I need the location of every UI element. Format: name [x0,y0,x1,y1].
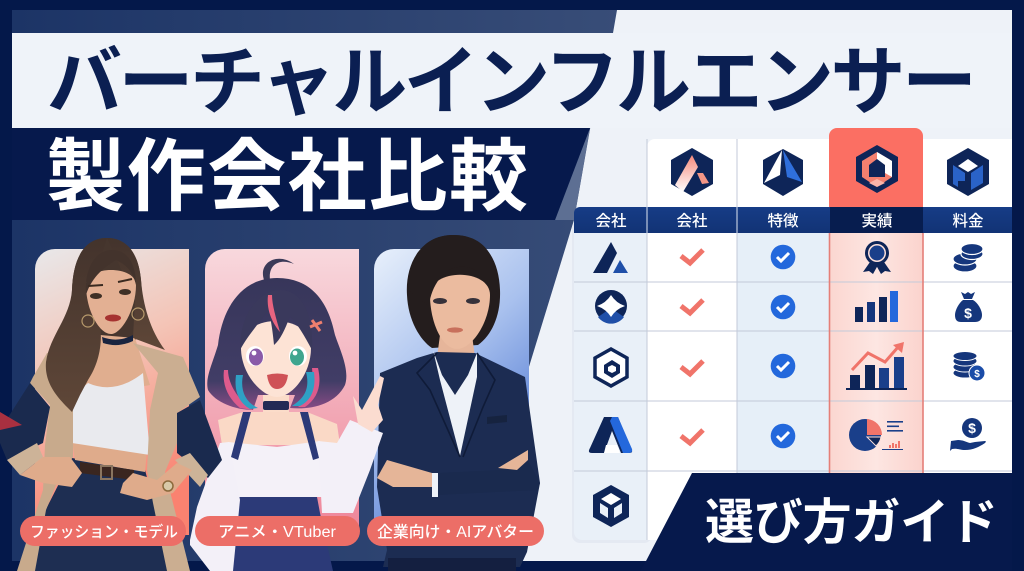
guide label: 選び方ガイド [705,496,998,550]
icon: coin stack [953,244,983,272]
straps [231,412,319,460]
icon: coins with dollar: $ [974,369,980,380]
pants [35,458,167,571]
logo 1 [671,148,713,196]
card: business [374,249,529,535]
logo 3 [856,145,898,193]
pill: anime vtuber: アニメ・VTuber [218,524,336,541]
column 5 body [923,233,1012,473]
white diagonal panel [470,10,1012,561]
card: anime [205,249,359,535]
column 1 body [574,233,647,540]
logo row [647,139,1012,207]
skirt [213,497,333,571]
table shadow [572,220,652,543]
left sleeve [190,442,240,571]
left lapel [417,353,460,457]
eyes and brows [88,279,132,299]
fringe [408,235,499,306]
chest [68,335,150,400]
belt [80,462,134,480]
pill: anime vtuber [195,516,360,546]
white blouse [228,441,322,497]
lips [447,327,463,333]
hair back [407,235,500,348]
icon: money bag [955,292,982,322]
guide band [640,473,1024,571]
highlighted logo cell [829,128,923,207]
hair behind head [72,238,143,342]
row logo: cube hex [593,485,629,527]
cuff [432,473,438,497]
header row: 特徴 [767,212,799,230]
icon: money bag: $ [964,305,972,321]
face [241,321,311,397]
pill: enterprise ai avatar: 企業向け・AIアバター [377,523,534,541]
character: business avatar [377,235,540,571]
pink strands [224,368,319,410]
icon: pie chart [849,419,903,451]
lips [105,314,121,322]
character: fashion model [0,238,222,571]
right lapel [463,353,495,457]
neck [263,392,289,416]
icon: hand with coin [950,418,986,451]
icon: coins with dollar [953,352,985,381]
pill: enterprise ai avatar [367,516,544,546]
row logo: hex ring mark [595,349,627,386]
fringe [86,250,136,295]
coral check marks [681,250,703,443]
coat left [17,350,73,571]
icon: bar chart [855,291,898,322]
subtitle band [12,128,590,221]
right sleeve [318,420,383,513]
hair clip [310,320,322,331]
icon: growth chart [846,342,907,390]
face [430,275,490,349]
pocket [487,415,507,424]
icon: award ribbon [863,241,891,274]
diagonal sliver [555,128,590,220]
bottom border [0,561,640,571]
shoulders [218,412,340,445]
row logo: A mark [593,242,628,273]
coat right [133,343,200,571]
earrings [82,308,144,327]
ahoge [263,259,294,280]
midriff [72,440,147,472]
bangs [240,290,312,350]
neck [436,335,476,385]
watch [163,481,173,491]
highlighted column borders [830,207,923,473]
teal tips [236,372,314,409]
pants [388,558,516,571]
right border [1012,0,1024,571]
shirt [433,350,477,456]
column 4 body [829,233,923,473]
eyes [246,346,307,366]
title: バーチャルインフルエンサー [47,40,977,124]
logo 2 [763,149,803,196]
grid lines [574,139,1012,540]
column 3 body [737,233,829,473]
icon: hand with coin: $ [968,420,976,436]
white top [68,373,150,455]
hair [207,278,346,410]
pill: fashion model [20,516,186,546]
comparison table [572,128,1012,543]
title band [12,33,1012,128]
header row: 実績 [861,212,893,230]
cuffs [7,443,43,475]
logo 4 [947,148,989,196]
pill: fashion model: ファッション・モデル [30,522,178,541]
column 2 body [647,233,737,540]
header row: 料金 [952,212,984,230]
lower hand [377,460,432,487]
header row [574,207,1012,233]
card: fashion [35,249,189,535]
hair right mass [107,238,165,350]
forearms and hands [20,457,82,487]
forearm [437,455,540,495]
hand [353,376,384,432]
eyes [433,298,480,304]
jacket [377,352,540,567]
upper hand [498,450,528,470]
character: anime vtuber [190,259,384,571]
mouth [267,374,288,389]
header row: 会社 [595,212,627,230]
right sleeve [177,400,222,478]
choker [263,401,289,410]
left sleeve [0,383,50,460]
row logo: circle mark [595,290,627,324]
hair left mass [46,238,107,412]
blue check badges [771,245,795,448]
choker [102,335,133,345]
face [86,270,136,334]
header row: 会社 [676,212,708,230]
subtitle: 製作会社比較 [46,132,528,221]
row logo: large A mark [589,417,632,453]
